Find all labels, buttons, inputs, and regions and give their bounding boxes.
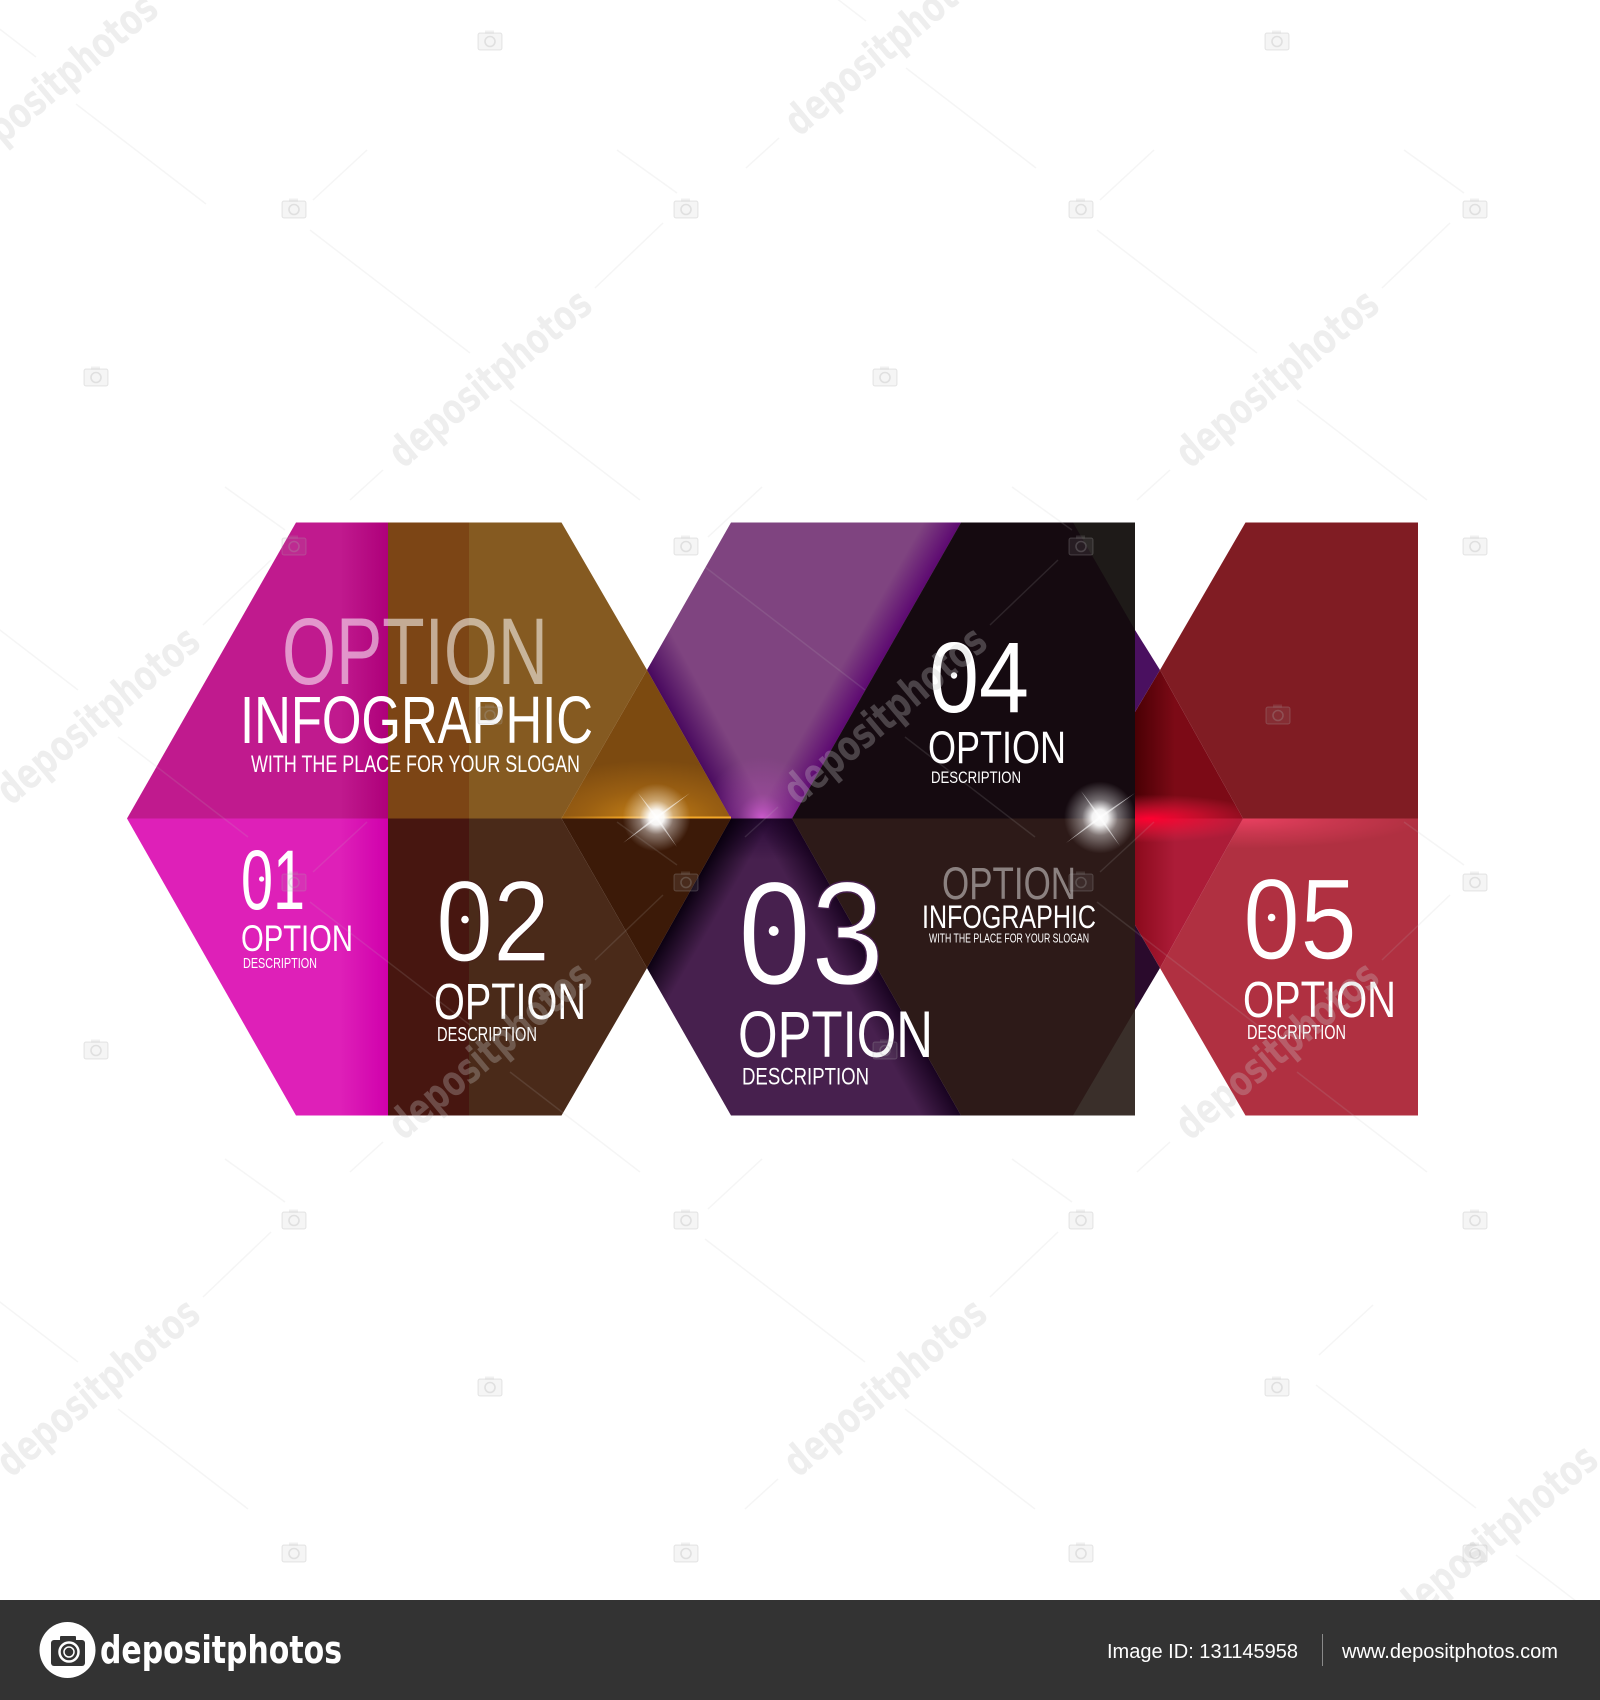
- title block: top left: OPTION: [282, 599, 548, 705]
- title block: top left: WITH THE PLACE FOR YOUR SLOGAN: [251, 751, 580, 778]
- watermark text: depositphotos: [773, 616, 996, 814]
- option 01 text: DESCRIPTION: [243, 955, 317, 972]
- logo wordmark: depositphotos: [100, 1628, 342, 1672]
- watermark text: depositphotos: [378, 279, 601, 477]
- option 02 text: DESCRIPTION: [437, 1024, 537, 1046]
- footer bar: [0, 1600, 1600, 1700]
- icon: camera logo: [40, 1622, 96, 1678]
- option 05 text: [1243, 856, 1396, 1044]
- watermark text: depositphotos: [773, 1288, 996, 1486]
- option 03 text: DESCRIPTION: [742, 1064, 869, 1090]
- hexagon 1: magenta and amber panel: [127, 522, 735, 1116]
- option 04 text: 04: [929, 622, 1029, 734]
- image id: Image ID: 131145958: [1107, 1641, 1298, 1663]
- website url: www.depositphotos.com: [1341, 1641, 1558, 1663]
- watermark text: depositphotos: [1165, 951, 1388, 1149]
- watermark text: depositphotos: [378, 951, 601, 1149]
- option 02 text: 02: [436, 858, 550, 986]
- hexagon 4: dark panel: [792, 522, 1160, 1116]
- secondary title block: dark panel: OPTION: [942, 858, 1076, 909]
- option 03 text: 03: [738, 852, 884, 1016]
- option 01 text: OPTION: [241, 918, 353, 959]
- option 01 text: [241, 833, 353, 972]
- option 04 text: [928, 622, 1066, 787]
- title block: top left: [240, 599, 593, 778]
- watermark text: depositphotos: [1165, 279, 1388, 477]
- option 04 text: OPTION: [928, 722, 1066, 773]
- option 05 text: OPTION: [1243, 971, 1396, 1028]
- hexagon 3: purple panel: [640, 520, 970, 1118]
- watermark cameras: [84, 30, 1487, 1562]
- secondary title block: dark panel: WITH THE PLACE FOR YOUR SLOGAN: [929, 932, 1089, 946]
- footer divider: [1322, 1634, 1323, 1666]
- option 01 text: 01: [241, 833, 305, 927]
- option 03 text: OPTION: [738, 997, 933, 1071]
- option 03 text: [738, 852, 933, 1090]
- hexagon 5: red panel: [1135, 522, 1418, 1116]
- option 05 text: 05: [1243, 856, 1357, 984]
- lens flare: right: [1064, 782, 1136, 854]
- option 02 text: [434, 858, 586, 1046]
- secondary title block: dark panel: INFOGRAPHIC: [922, 899, 1096, 935]
- title block: top left: INFOGRAPHIC: [240, 683, 593, 758]
- option 04 text: DESCRIPTION: [931, 768, 1021, 787]
- lens flare: left: [622, 784, 690, 852]
- option 02 text: OPTION: [434, 973, 586, 1030]
- secondary title block: dark panel: [922, 858, 1096, 946]
- option 05 text: DESCRIPTION: [1247, 1022, 1346, 1044]
